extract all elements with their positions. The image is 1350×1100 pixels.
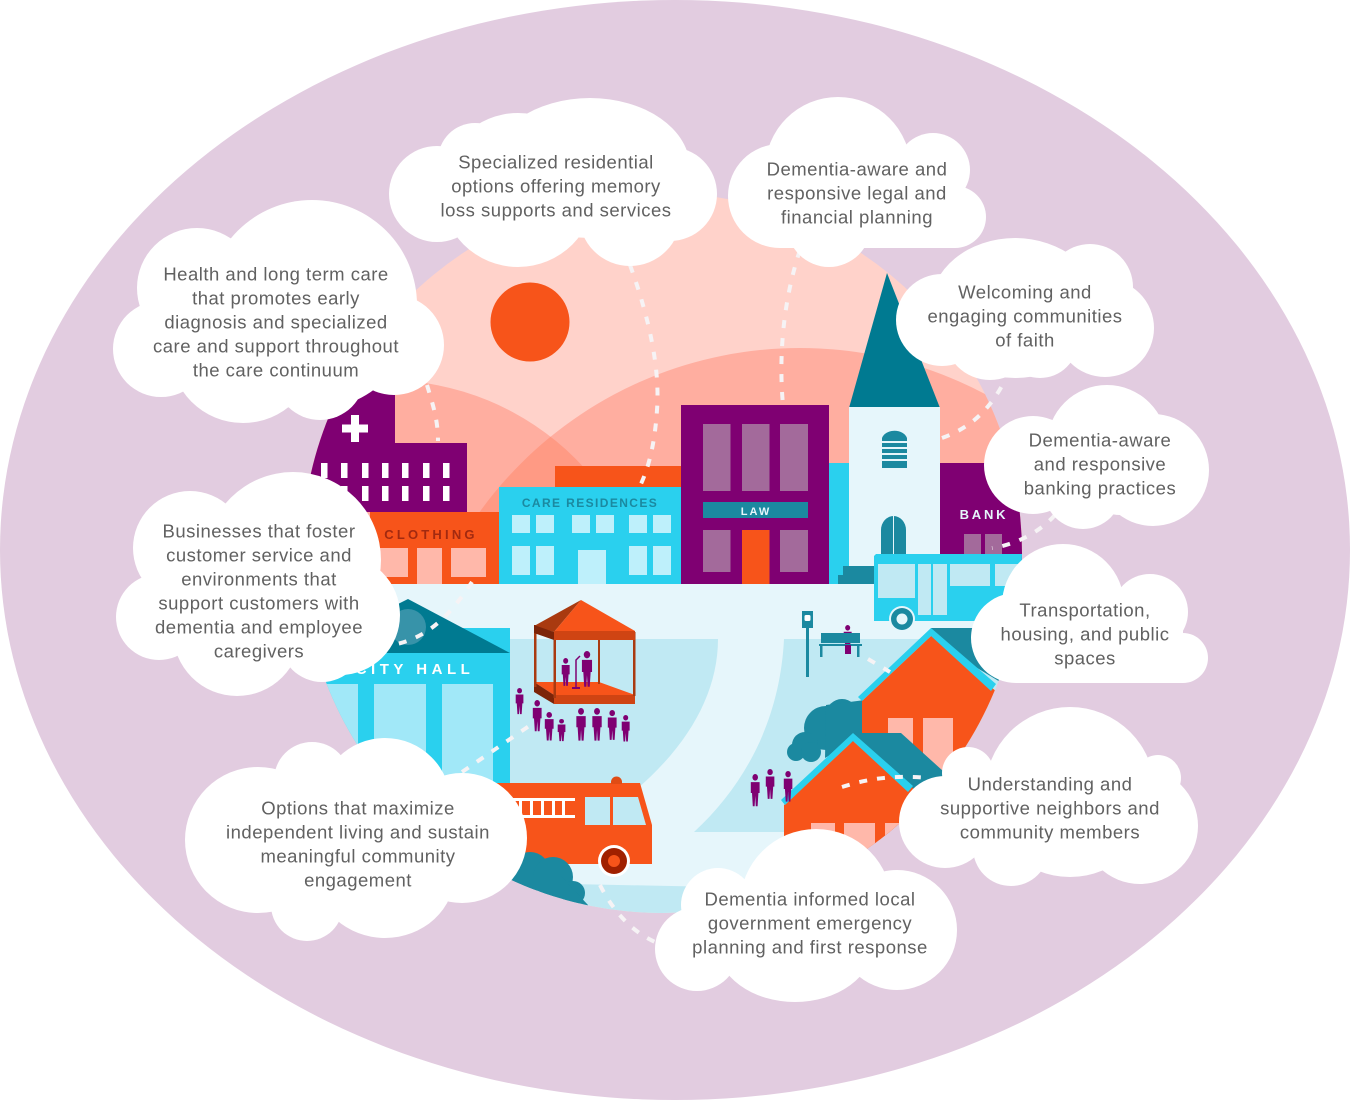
- callout: health care: Health and long term care: [163, 264, 389, 285]
- callout: legal and financial: financial planning: [781, 207, 933, 228]
- callout: businesses: caregivers: [214, 641, 304, 662]
- bus stop: [802, 611, 813, 677]
- sky arcs: [310, 348, 1022, 913]
- building: hospital: [310, 390, 467, 512]
- callout: health care: [113, 200, 444, 423]
- callout: faith: engaging communities: [927, 306, 1123, 327]
- dotted connectors: [375, 250, 1055, 942]
- callout: businesses: [116, 472, 400, 696]
- callout: residential: loss supports and services: [440, 200, 672, 221]
- building: church: [838, 273, 940, 584]
- callout: independent living: meaningful community: [260, 846, 456, 867]
- callout: independent living: [185, 738, 527, 941]
- ground: [326, 584, 999, 913]
- callout: businesses: dementia and employee: [155, 617, 363, 638]
- callout: emergency response: [655, 829, 957, 1002]
- callout: emergency response: planning and first response: [692, 937, 928, 958]
- building: clothing store: CLOTHING: [384, 527, 478, 542]
- bench with person: [819, 625, 862, 657]
- hospital windows: [321, 463, 450, 501]
- callout: health care: diagnosis and specialized: [164, 312, 388, 333]
- callout: neighbors: Understanding and: [968, 774, 1132, 795]
- callout: banking: [984, 385, 1209, 529]
- building: bank: BANK: [960, 507, 1008, 522]
- road panels: [510, 639, 999, 913]
- cyan building: [829, 463, 849, 584]
- callout: neighbors: supportive neighbors and: [940, 798, 1160, 819]
- callout: businesses: customer service and: [166, 545, 352, 566]
- callout: residential: Specialized residential: [458, 152, 654, 173]
- building: care residences: [499, 466, 681, 584]
- callout: health care: that promotes early: [192, 288, 360, 309]
- callout: legal and financial: responsive legal and: [767, 183, 947, 204]
- building: care residences: CARE RESIDENCES: [522, 496, 658, 510]
- gazebo: [534, 600, 636, 704]
- callout: banking: Dementia-aware: [1029, 430, 1171, 451]
- callout: banking: banking practices: [1024, 478, 1176, 499]
- callout: banking: and responsive: [1034, 454, 1166, 475]
- building: city hall: CITY HALL: [356, 661, 474, 678]
- building: city hall: [326, 599, 510, 783]
- callout: transportation: [971, 544, 1208, 683]
- bus: [874, 554, 1030, 632]
- building: law office: [681, 405, 829, 584]
- callout: neighbors: [899, 707, 1198, 886]
- town illustration: [310, 197, 1022, 913]
- callout: emergency response: Dementia informed local: [705, 889, 915, 910]
- callout: businesses: Businesses that foster: [162, 521, 356, 542]
- callout: health care: care and support throughout: [153, 336, 399, 357]
- callout: residential: [389, 98, 717, 267]
- callout: health care: the care continuum: [193, 360, 359, 381]
- building: clothing store: [370, 512, 499, 584]
- callout: independent living: independent living and sustain: [226, 822, 490, 843]
- neighbors: [751, 769, 792, 806]
- callout: independent living: engagement: [304, 870, 412, 891]
- tree near truck: [512, 852, 588, 906]
- callout: transportation: Transportation,: [1019, 600, 1151, 621]
- speakers on stage: [562, 658, 570, 686]
- callout: faith: of faith: [995, 330, 1055, 351]
- callout: legal and financial: Dementia-aware and: [767, 159, 947, 180]
- callout: emergency response: government emergency: [708, 913, 912, 934]
- trees behind houses: [787, 699, 865, 762]
- callout: neighbors: community members: [960, 822, 1140, 843]
- building: law office: LAW: [741, 506, 771, 518]
- building: bank: [940, 463, 1022, 560]
- house: back: [858, 628, 999, 840]
- callout: businesses: support customers with: [158, 593, 360, 614]
- callout: transportation: housing, and public: [1001, 624, 1169, 645]
- callout: independent living: Options that maximize: [261, 798, 455, 819]
- fire truck: [490, 776, 652, 877]
- callout: faith: [896, 238, 1154, 380]
- crowd: [516, 688, 630, 742]
- callout: businesses: environments that: [181, 569, 337, 590]
- hospital cross: [342, 415, 368, 442]
- callout: legal and financial: [728, 97, 986, 267]
- callout: residential: options offering memory: [451, 176, 661, 197]
- callout: transportation: spaces: [1054, 648, 1116, 669]
- sky: [416, 197, 985, 436]
- callout: faith: Welcoming and: [958, 282, 1092, 303]
- house: front: [781, 733, 942, 849]
- sun: [490, 282, 570, 362]
